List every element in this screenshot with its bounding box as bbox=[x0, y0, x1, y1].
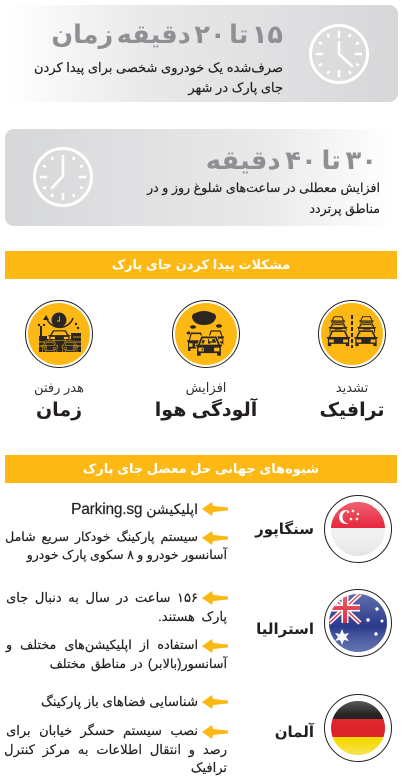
text: Australia apps: استفاده از اپلیکیشن‌های مختلف و bbox=[6, 638, 198, 652]
country: Germany: آلمان bbox=[275, 724, 314, 741]
text: increased delay: مناطق پرتردد bbox=[309, 202, 380, 216]
flag: Australia bbox=[324, 589, 392, 657]
value: زمان bbox=[36, 400, 82, 421]
value: ترافیک bbox=[319, 400, 385, 421]
text: time spent searching: صرف‌شده یک خودروی شخصی برای پیدا کردن bbox=[34, 60, 283, 75]
heading: 30 to 40 minutes: ۳۰ تا ۴۰ دقیقه bbox=[206, 147, 377, 175]
icon: traffic bbox=[318, 300, 386, 368]
text: Germany sensors: نصب سیستم حسگر خیابان برای bbox=[6, 723, 198, 738]
icon: air pollution bbox=[172, 300, 240, 368]
text: increased delay: افزایش معطلی در ساعت‌های شلوغ روز و در bbox=[147, 181, 380, 195]
panel: 30 to 40 minutes bbox=[5, 129, 395, 226]
panel: 15 to 20 minutes bbox=[8, 5, 398, 102]
caption: تشدید bbox=[336, 380, 368, 395]
text: time spent searching: جای پارک در شهر bbox=[188, 80, 283, 95]
banner: parking problems bbox=[5, 251, 397, 279]
text: Australia hours bbox=[6, 590, 227, 624]
icon: wasted time bbox=[25, 300, 93, 368]
text: increased delay bbox=[146, 181, 380, 216]
text: Singapore app: اپلیکیشن Parking.sg bbox=[71, 501, 198, 518]
text: Australia apps: آسانسور(بالابر) در مناطق مختلف bbox=[50, 657, 227, 671]
label: time bbox=[34, 380, 84, 421]
country: Singapore: سنگاپور bbox=[255, 521, 314, 538]
text: Australia hours: ۱۵۶ ساعت در سال به دنبال جای bbox=[6, 590, 198, 605]
text: Germany spaces: شناسایی فضاهای باز پارکینگ bbox=[41, 694, 198, 709]
icon: clock 1 bbox=[309, 24, 369, 84]
banner title: مشکلات پیدا کردن جای پارک bbox=[112, 257, 290, 272]
text: Germany sensors: ترافیک bbox=[191, 760, 227, 775]
caption: هدر رفتن bbox=[34, 380, 84, 395]
label: traffic bbox=[319, 380, 385, 421]
country: Australia: استرالیا bbox=[256, 621, 314, 638]
icon: clock 2 bbox=[33, 147, 93, 207]
banner title: شیوه‌های جهانی حل معضل جای پارک bbox=[83, 461, 319, 476]
flag: Germany bbox=[324, 694, 392, 762]
caption: افزایش bbox=[186, 380, 226, 395]
value: آلودگی هوا bbox=[155, 400, 257, 421]
text: Germany sensors: رصد و انتقال اطلاعات به مرکز کنترل bbox=[4, 742, 227, 756]
text: Singapore system: سیستم پارکینگ خودکار سریع شامل bbox=[5, 530, 198, 544]
text: Australia hours: پارک هستند. bbox=[158, 609, 227, 624]
label: air pollution bbox=[155, 380, 258, 421]
text: Singapore system: آسانسور خودرو و ۸ سکوی پارک خودرو bbox=[27, 548, 227, 562]
banner: global solutions bbox=[5, 455, 397, 483]
flag: Singapore bbox=[324, 495, 392, 563]
text: Singapore system bbox=[5, 530, 228, 562]
text: time spent searching bbox=[34, 60, 283, 96]
heading: 15 to 20 minutes: ۱۵ تا ۲۰ دقیقه زمان bbox=[51, 21, 283, 49]
text: Germany sensors bbox=[4, 723, 227, 776]
text: Australia apps bbox=[5, 638, 228, 672]
